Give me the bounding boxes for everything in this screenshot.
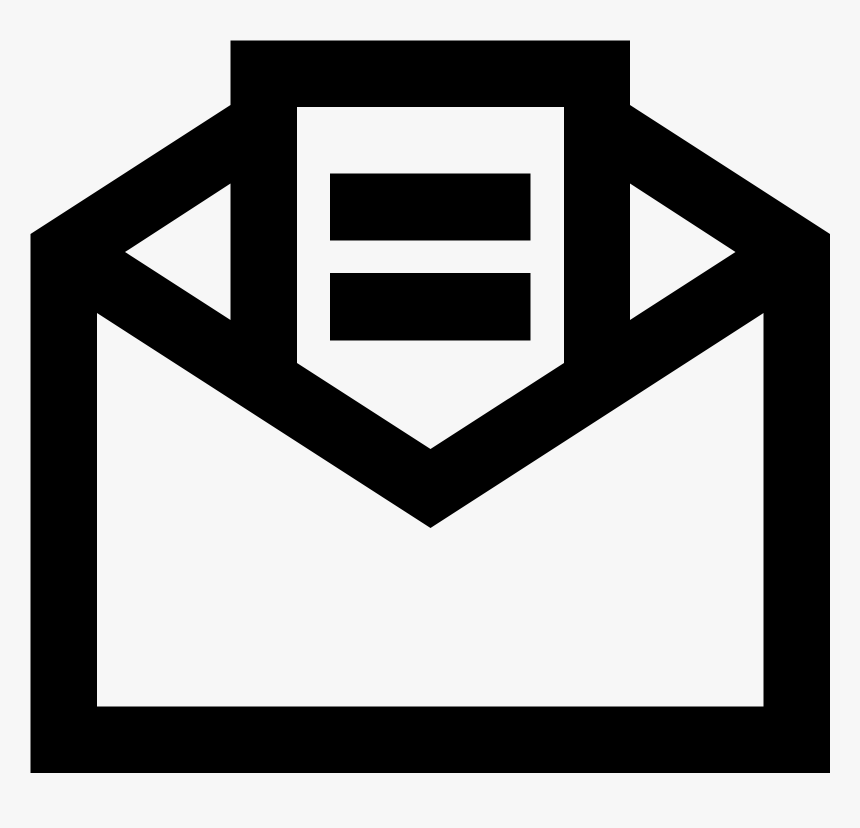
letter text line 1 (330, 174, 530, 240)
letter text line 2 (330, 273, 530, 340)
